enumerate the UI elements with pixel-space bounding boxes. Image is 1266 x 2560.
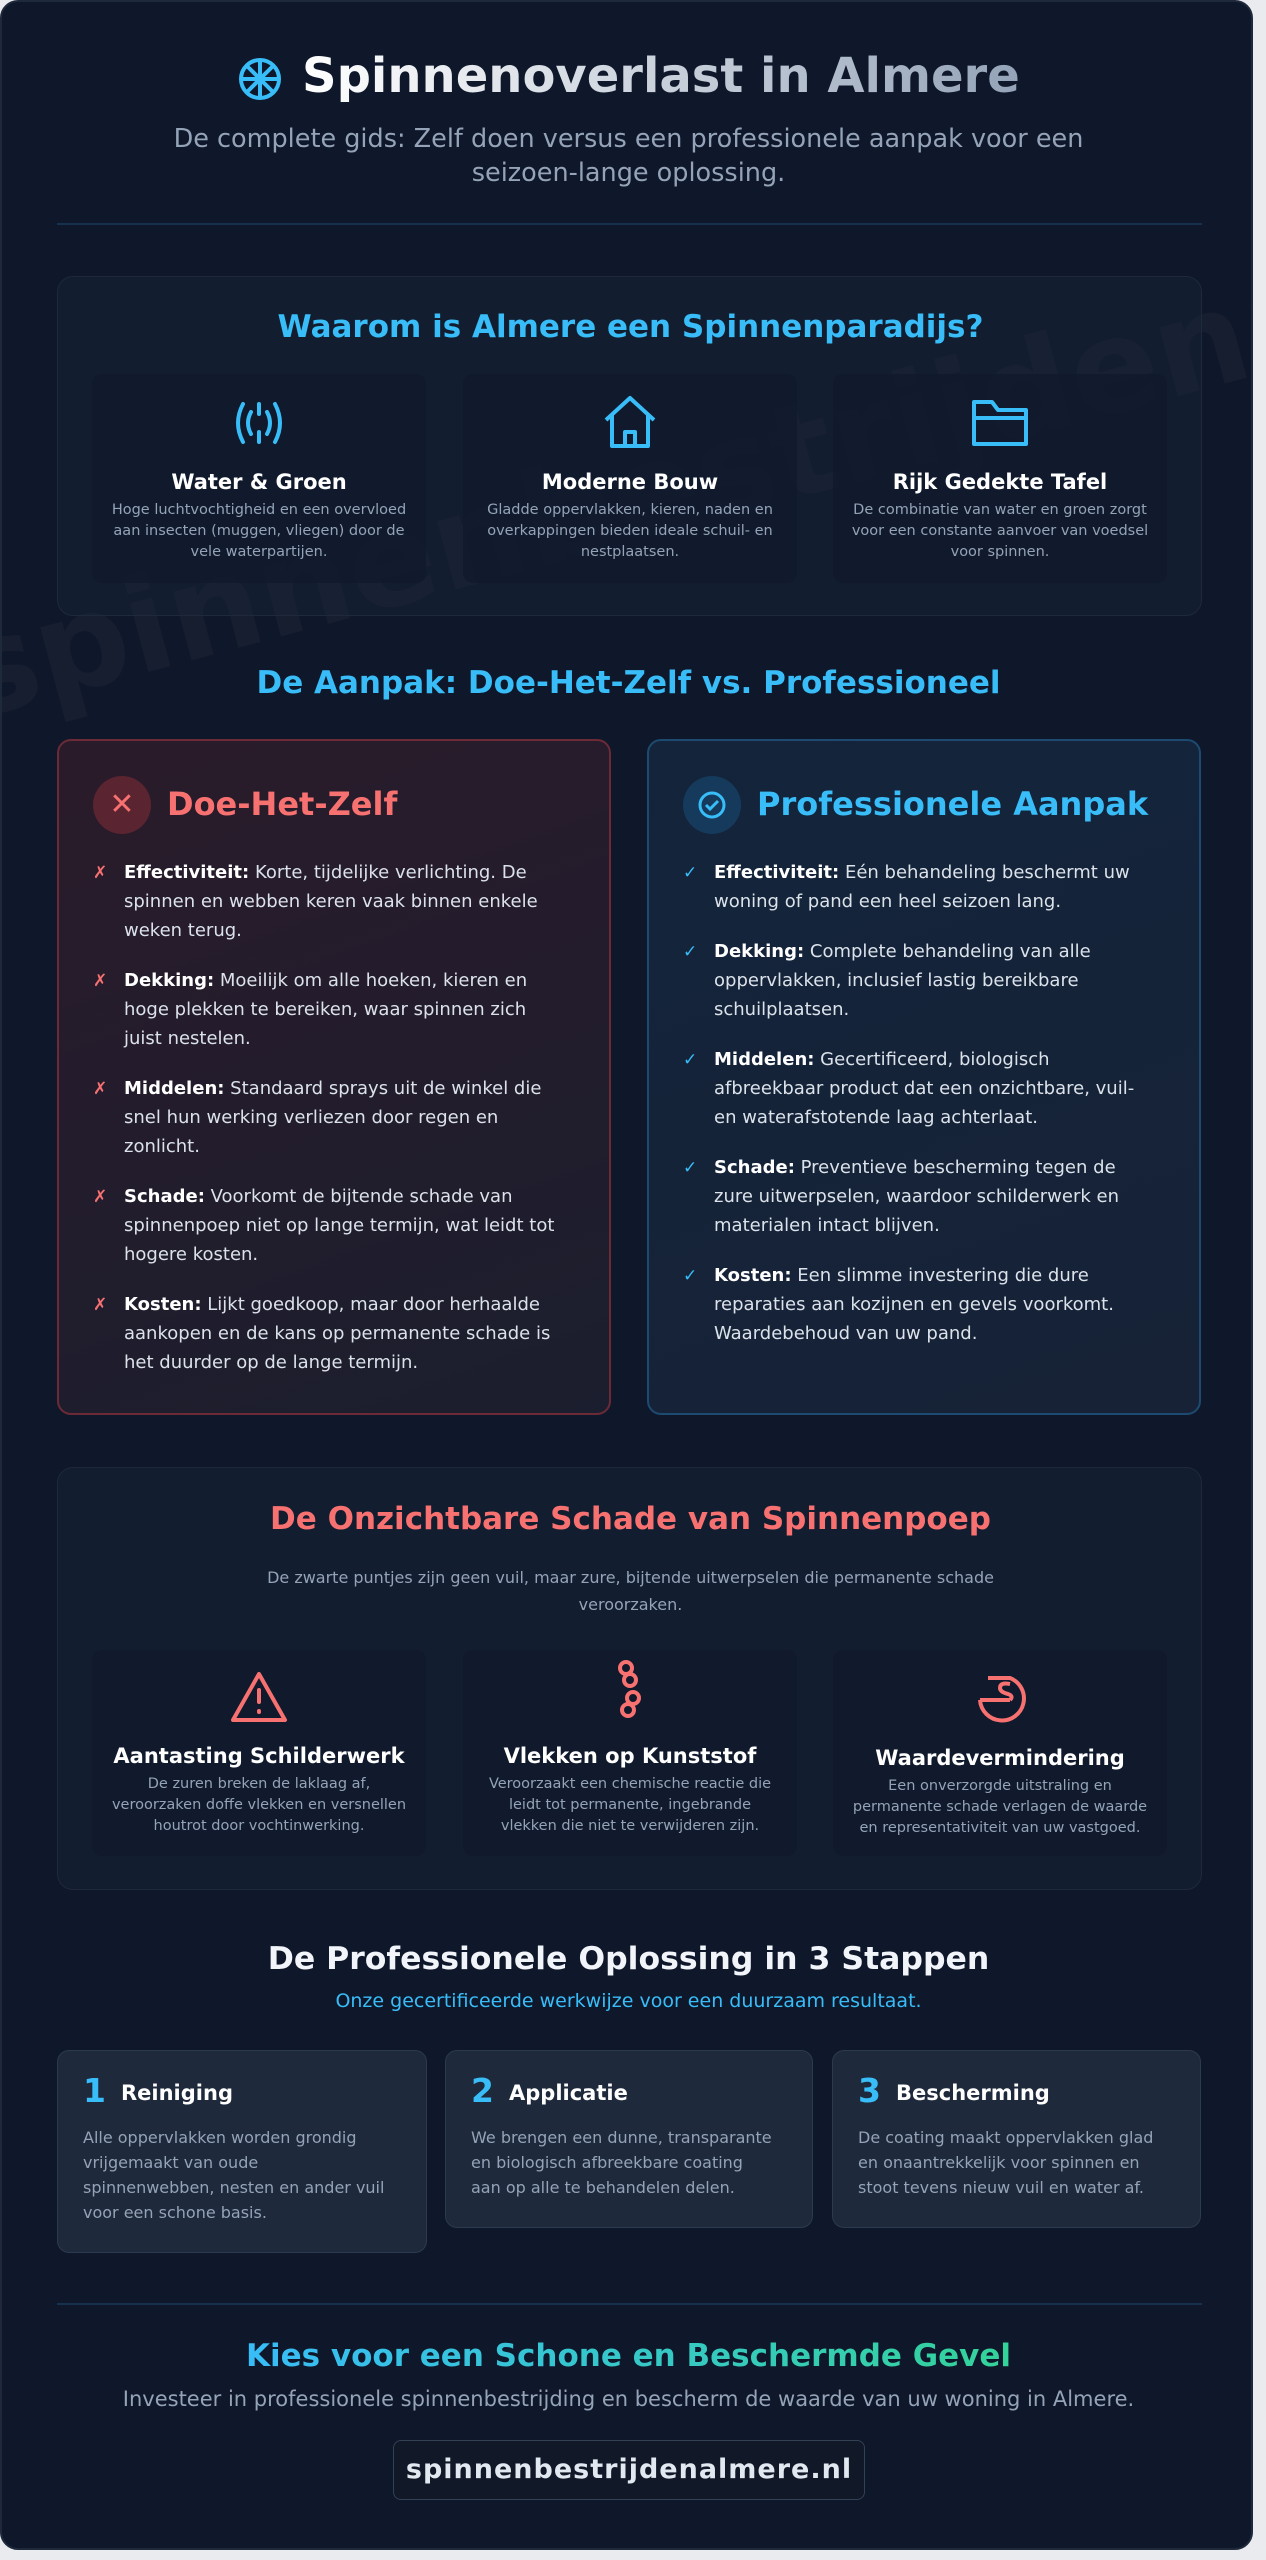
panel: why Almere <box>57 276 1202 616</box>
card: kunststof: Vlekken op Kunststof <box>504 1744 756 1768</box>
card: water: Water & Groen <box>171 470 347 494</box>
list: diy: ✗ <box>93 863 107 883</box>
card: bouw <box>463 374 797 583</box>
step 2: Applicatie <box>509 2081 628 2105</box>
icon: stains <box>618 1660 641 1718</box>
card: kunststof: Veroorzaakt een chemische reactie die leidt tot permanente, ingebrande vlekken die niet te verwijderen zijn. <box>489 1776 771 1834</box>
list: pro: Middelen: Gecertificeerd, biologisch afbreekbaar product dat een onzichtbare, vuil- en waterafstotende laag achterlaat. <box>714 1049 1134 1128</box>
card: waarde: Waardevermindering <box>875 1746 1125 1770</box>
subtitle: De complete gids: Zelf doen versus een professionele aanpak voor een seizoen-lange oplossing. <box>174 124 1083 188</box>
list: pro: ✓ <box>683 863 697 883</box>
step 3: 3 <box>858 2071 881 2110</box>
list: diy: ✗ <box>93 1187 107 1207</box>
list: diy: Effectiviteit: Korte, tijdelijke verlichting. De spinnen en webben keren vaak binnen enkele weken terug. <box>124 862 538 941</box>
list: pro: ✓ <box>683 1158 697 1178</box>
icon: check circle <box>683 776 741 834</box>
list: diy: Dekking: Moeilijk om alle hoeken, kieren en hoge plekken te bereiken, waar spinnen zich juist nestelen. <box>124 970 527 1049</box>
list: diy: ✗ <box>93 1079 107 1099</box>
list: pro: Effectiviteit: Eén behandeling beschermt uw woning of pand een heel seizoen lang. <box>714 862 1130 912</box>
icon: house <box>604 396 656 448</box>
list: diy: Kosten: Lijkt goedkoop, maar door herhaalde aankopen en de kans op permanente schade is het duurder op de lange termijn. <box>124 1294 550 1373</box>
step 3 <box>832 2050 1201 2228</box>
title: Spinnenoverlast in Almere <box>302 48 1020 104</box>
card: tafel: De combinatie van water en groen zorgt voor een constante aanvoer van voedsel voor spinnen. <box>852 502 1148 560</box>
icon: x circle <box>93 776 151 834</box>
list: pro: ✓ <box>683 1266 697 1286</box>
CTA text: Investeer in professionele spinnenbestrijding en bescherm de waarde van uw woning in Almere. <box>123 2387 1134 2411</box>
step 1 <box>57 2050 427 2253</box>
card: tafel: Rijk Gedekte Tafel <box>893 470 1107 494</box>
card: waarde: Een onverzorgde uitstraling en permanente schade verlagen de waarde en representativiteit van uw vastgoed. <box>853 1778 1147 1836</box>
icon: folder <box>972 400 1028 446</box>
card: bouw: Gladde oppervlakken, kieren, naden en overkappingen bieden ideale schuil- en nestplaatsen. <box>487 502 773 560</box>
list: diy: Middelen: Standaard sprays uit de winkel die snel hun werking verliezen door regen en zonlicht. <box>124 1078 541 1157</box>
panel: schade <box>57 1467 1202 1890</box>
panel: pro <box>647 739 1201 1415</box>
panel: DIY <box>57 739 611 1415</box>
card: schilderwerk: De zuren breken de laklaag af, veroorzaken doffe vlekken en versnellen houtrot door vochtinwerking. <box>112 1776 406 1834</box>
icon: spinner <box>239 58 281 100</box>
intro text: De zwarte puntjes zijn geen vuil, maar zure, bijtende uitwerpselen die permanente schade veroorzaken. <box>267 1568 994 1614</box>
card: water: Hoge luchtvochtigheid en een overvloed aan insecten (muggen, vliegen) door de vele waterpartijen. <box>112 502 406 560</box>
step 3: Bescherming <box>896 2081 1050 2105</box>
heading: Professionele Aanpak <box>757 785 1148 823</box>
icon: water <box>236 402 282 444</box>
step 2 <box>445 2050 813 2228</box>
card: schilderwerk: Aantasting Schilderwerk <box>113 1744 405 1768</box>
card: bouw: Moderne Bouw <box>542 470 718 494</box>
CTA button: spinnenbestrijdenalmere.nl <box>406 2454 852 2485</box>
icon: value <box>978 1676 1026 1722</box>
CTA button <box>393 2440 865 2500</box>
heading: Waarom is Almere een Spinnenparadijs? <box>277 309 984 345</box>
list: pro: ✓ <box>683 942 697 962</box>
list: pro: ✓ <box>683 1050 697 1070</box>
list: diy: ✗ <box>93 1295 107 1315</box>
list: diy <box>93 862 554 1373</box>
heading: aanpak: De Aanpak: Doe-Het-Zelf vs. Professioneel <box>256 665 1001 701</box>
list: diy: Schade: Voorkomt de bijtende schade van spinnenpoep niet op lange termijn, wat leidt tot hogere kosten. <box>124 1186 554 1265</box>
list: pro: Dekking: Complete behandeling van alle oppervlakken, inclusief lastig bereikbare schuilplaatsen. <box>714 941 1091 1020</box>
step 1: 1 <box>83 2071 106 2110</box>
list: diy: ✗ <box>93 971 107 991</box>
list: pro <box>683 862 1134 1344</box>
step 3: De coating maakt oppervlakken glad en onaantrekkelijk voor spinnen en stoot tevens nieuw vuil en water af. <box>858 2128 1153 2197</box>
heading: De Onzichtbare Schade van Spinnenpoep <box>270 1501 991 1537</box>
step 1: Reiniging <box>121 2081 233 2105</box>
list: pro: Kosten: Een slimme investering die dure reparaties aan kozijnen en gevels voorkomt. Waardebehoud van uw pand. <box>714 1265 1114 1344</box>
card: waarde <box>833 1650 1167 1856</box>
icon: x circle: ✕ <box>109 787 135 822</box>
step 1: Alle oppervlakken worden grondig vrijgemaakt van oude spinnenwebben, nesten en ander vuil voor een schone basis. <box>83 2128 384 2222</box>
icon: warning <box>231 1672 288 1722</box>
heading: stappen: De Professionele Oplossing in 3 Stappen <box>268 1941 989 1977</box>
card: tafel <box>833 374 1167 583</box>
list: pro: Schade: Preventieve bescherming tegen de zure uitwerpselen, waardoor schilderwerk en materialen intact blijven. <box>714 1157 1119 1236</box>
card: kunststof <box>463 1650 797 1856</box>
step 2: We brengen een dunne, transparante en biologisch afbreekbare coating aan op alle te behandelen delen. <box>471 2128 772 2197</box>
CTA heading: Kies voor een Schone en Beschermde Gevel <box>246 2338 1011 2374</box>
heading: Doe-Het-Zelf <box>167 785 397 823</box>
step 2: 2 <box>471 2071 494 2110</box>
card: schilderwerk <box>92 1650 426 1856</box>
card: water <box>92 374 426 583</box>
subheading: Onze gecertificeerde werkwijze voor een duurzaam resultaat. <box>335 1990 922 2012</box>
